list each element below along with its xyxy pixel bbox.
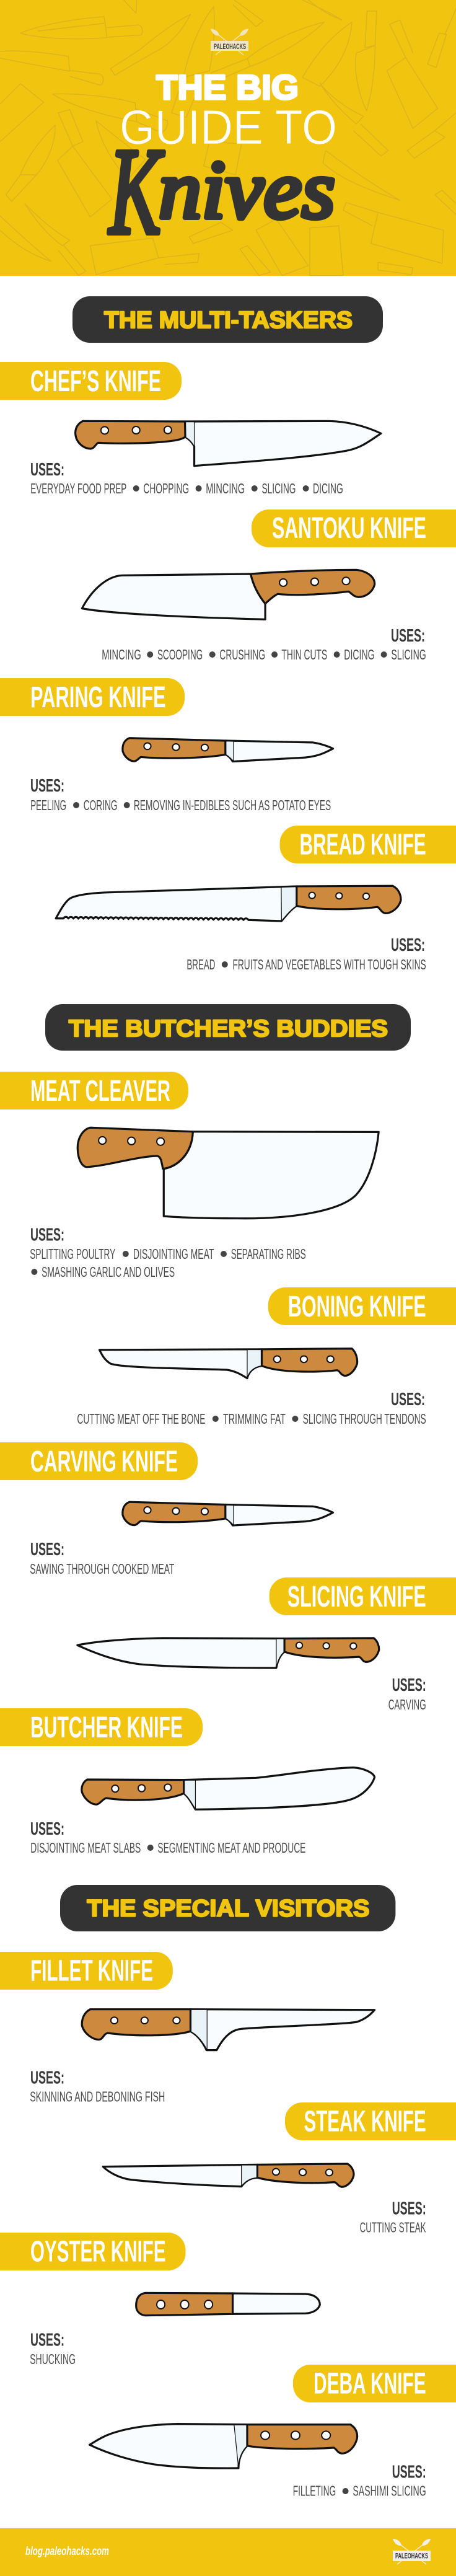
knife name label: FILLET KNIFE [30, 1955, 153, 1987]
title [108, 68, 337, 260]
icon: butcher knife [82, 1768, 375, 1809]
knife name label [0, 678, 185, 716]
uses heading: USES: [30, 2330, 64, 2350]
uses list: SPLITTING POULTRY [30, 1246, 115, 1262]
uses list: SAWING THROUGH COOKED MEAT [30, 1561, 174, 1577]
knife name label [0, 1708, 203, 1746]
panel: header [0, 0, 456, 276]
uses heading: USES: [30, 1819, 64, 1839]
knife name label [0, 2233, 186, 2270]
title: nives [159, 144, 335, 236]
uses list: DISJOINTING MEAT SLABS [30, 1840, 141, 1856]
uses heading: USES: [392, 2199, 426, 2218]
uses list: BREAD [186, 956, 215, 973]
panel: oyster knife [0, 2233, 320, 2367]
uses list: CARVING [388, 1696, 426, 1713]
uses list: DICING [344, 646, 375, 663]
panel: bread knife [56, 826, 456, 973]
knife name label [0, 362, 182, 400]
uses list [30, 480, 343, 496]
uses list [293, 2483, 426, 2499]
knife name label: PARING KNIFE [30, 681, 166, 714]
panel: boning knife [77, 1287, 456, 1427]
section heading: the special visitors: THE SPECIAL VISITORS [87, 1896, 369, 1922]
uses heading: USES: [391, 935, 425, 955]
uses list [30, 1840, 305, 1856]
footer website text: blog.paleohacks.com [25, 2545, 109, 2558]
uses list: DISJOINTING MEAT [133, 1246, 214, 1262]
panel: fillet knife [0, 1952, 375, 2105]
panel: deba knife [90, 2365, 456, 2499]
panel: butcher knife [0, 1708, 375, 1856]
uses heading: USES: [30, 1225, 64, 1245]
icon: santoku knife [82, 570, 375, 619]
icon: deba knife [90, 2424, 357, 2468]
uses list: MINCING [102, 646, 141, 663]
uses list: CRUSHING [219, 646, 265, 663]
knife name label [0, 1442, 198, 1480]
uses heading: USES: [30, 1540, 64, 1559]
uses list: SEPARATING RIBS [231, 1246, 306, 1262]
uses list [102, 646, 426, 663]
section heading: the special visitors [60, 1885, 395, 1931]
panel: footer [0, 2528, 456, 2576]
panel: meat cleaver [0, 1072, 379, 1280]
uses list: SEGMENTING MEAT AND PRODUCE [157, 1840, 305, 1856]
title: GUIDE TO [120, 100, 337, 154]
uses list: TRIMMING FAT [223, 1411, 286, 1427]
section heading: the multi-taskers: THE MULTI-TASKERS [104, 307, 353, 333]
uses heading: USES: [392, 1675, 426, 1695]
panel: paring knife [0, 678, 333, 813]
uses list: THIN CUTS [281, 646, 327, 663]
uses list: SKINNING AND DEBONING FISH [30, 2089, 165, 2105]
uses list: SLICING [261, 480, 296, 496]
section heading: the butcher's buddies: THE BUTCHER’S BUDDIES [69, 1016, 388, 1042]
knife name label: BUTCHER KNIFE [30, 1711, 183, 1744]
uses list [30, 797, 331, 813]
uses list: EVERYDAY FOOD PREP [30, 480, 126, 496]
knife name label: CARVING KNIFE [30, 1445, 178, 1478]
uses list: SLICING [391, 646, 426, 663]
uses heading: USES: [30, 460, 64, 480]
knife name label [0, 1952, 173, 1990]
knife name label: CHEF’S KNIFE [30, 365, 161, 398]
panel: chef's knife [0, 362, 381, 496]
icon: paring knife [123, 738, 333, 762]
panel: slicing knife [77, 1577, 456, 1713]
uses list: DICING [313, 480, 343, 496]
title: K [108, 123, 164, 260]
panel: carving knife [0, 1442, 333, 1577]
logo: PaleoHacks footer: PALEOHACKS [395, 2551, 428, 2560]
icon: meat cleaver [77, 1127, 379, 1219]
uses list: SCOOPING [157, 646, 203, 663]
uses list: SHUCKING [30, 2351, 76, 2367]
uses heading: USES: [392, 2463, 426, 2482]
uses list [30, 1246, 306, 1280]
uses list: CHOPPING [143, 480, 189, 496]
logo: PaleoHacks footer [393, 2539, 431, 2564]
title: THE BIG [156, 68, 299, 107]
uses list: SMASHING GARLIC AND OLIVES [42, 1264, 175, 1280]
knife name label: OYSTER KNIFE [30, 2235, 166, 2269]
panel: santoku knife [82, 509, 456, 663]
uses list: MINCING [206, 480, 245, 496]
uses heading: USES: [391, 1390, 425, 1409]
logo: PaleoHacks: PALEOHACKS [214, 42, 246, 51]
logo: PaleoHacks [211, 29, 248, 55]
panel: steak knife [103, 2102, 456, 2236]
uses heading: USES: [30, 2068, 64, 2088]
background knife outline pattern [0, 0, 456, 276]
icon: oyster knife [136, 2293, 320, 2316]
knife name label [0, 1072, 188, 1109]
section heading: the butcher's buddies [45, 1004, 411, 1051]
icon: carving knife [123, 1502, 333, 1525]
uses list: CUTTING MEAT OFF THE BONE [77, 1411, 205, 1427]
icon: boning knife [100, 1349, 357, 1378]
icon: bread knife [56, 886, 401, 921]
icon: slicing knife [77, 1638, 379, 1668]
icon: chef's knife [76, 421, 381, 466]
uses list: PEELING [30, 797, 66, 813]
icon: steak knife [103, 2164, 354, 2187]
uses list: FILLETING [293, 2483, 336, 2499]
uses heading: USES: [30, 776, 64, 796]
icon: fillet knife [82, 2009, 375, 2050]
uses list: CORING [84, 797, 118, 813]
uses list [77, 1411, 426, 1427]
section heading: the multi-taskers [72, 296, 383, 343]
uses heading: USES: [391, 626, 425, 646]
knife name label: MEAT CLEAVER [30, 1075, 170, 1108]
